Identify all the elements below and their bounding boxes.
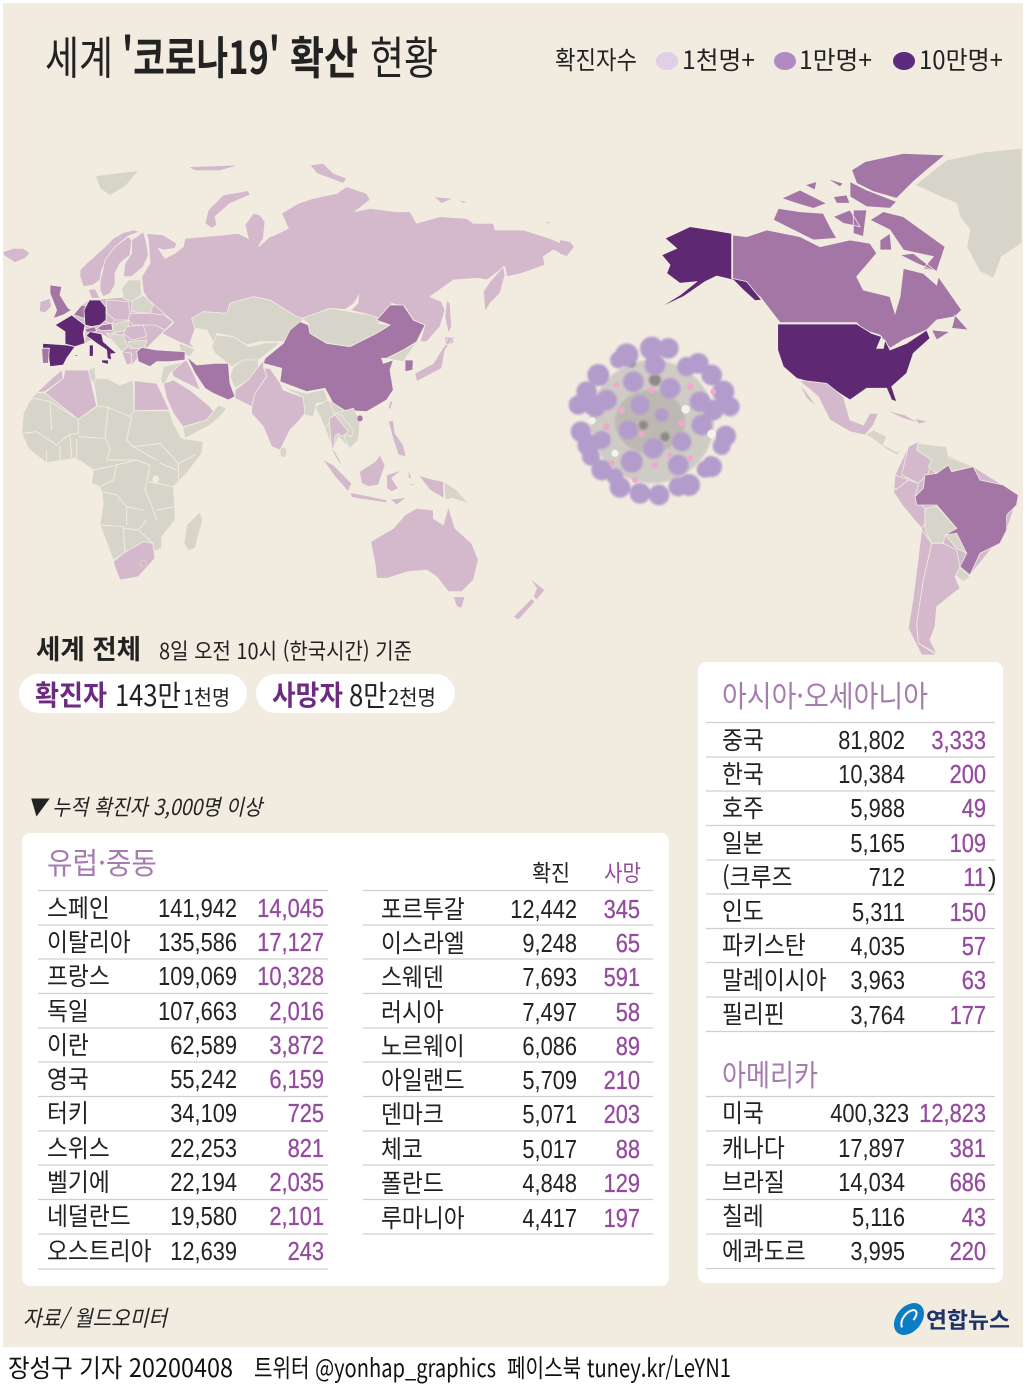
- country names: 브라질: [722, 1162, 785, 1198]
- pill: confirmed total: [19, 673, 247, 715]
- deaths: 200: [950, 760, 986, 789]
- country names, right column: [381, 889, 465, 1234]
- Bolivia: [925, 506, 957, 543]
- Severnaya Zemlya: [310, 163, 347, 183]
- deaths: 220: [950, 1237, 986, 1266]
- confirmed: 3,963: [850, 966, 905, 995]
- country names, right column: 덴마크: [381, 1094, 444, 1130]
- United States: [778, 324, 930, 402]
- deaths, right column: 591: [604, 963, 640, 992]
- Oman and Yemen: [183, 405, 227, 438]
- confirmed, left column: 141,942: [158, 894, 237, 923]
- Ecuador: [894, 475, 908, 490]
- Belarus: [132, 295, 153, 313]
- deaths, left column: 3,872: [269, 1031, 324, 1060]
- map: Svalbard: [96, 171, 138, 195]
- confirmed: 712: [869, 863, 905, 892]
- pill: confirmed total: 143만: [115, 673, 181, 715]
- Brazil: [915, 465, 1018, 575]
- country names: 인도: [722, 891, 764, 927]
- pill: death total: 2천명: [388, 682, 436, 712]
- confirmed: 3,764: [850, 1001, 905, 1030]
- pill: death total: [256, 673, 455, 715]
- deaths, right column: [604, 895, 640, 1233]
- Canadian Arctic islands: [773, 153, 968, 340]
- Morocco: [37, 370, 63, 393]
- Austria: [97, 323, 113, 331]
- Sweden: [100, 237, 132, 297]
- Lake Baikal: [344, 294, 359, 312]
- Paraguay: [945, 533, 967, 553]
- confirmed, right column: 7,693: [522, 963, 577, 992]
- Pakistan: [235, 357, 267, 407]
- closing parenthesis: ): [988, 862, 997, 892]
- title: [45, 22, 438, 87]
- Malay Peninsula: [330, 447, 343, 467]
- title: '코로나19': [122, 22, 280, 87]
- Caucasus: [178, 343, 195, 357]
- logo: Yonhap News: [888, 1297, 1010, 1341]
- central Europe land: [72, 295, 173, 365]
- legend: confirmed cases: 확진자수: [555, 41, 637, 77]
- legend: confirmed cases: 1만명+: [799, 41, 872, 77]
- Indochina land: [315, 400, 360, 450]
- heading: world total: [36, 628, 412, 667]
- pill: confirmed total: 확진자: [35, 674, 107, 714]
- confirmed, right column: 6,086: [522, 1032, 577, 1061]
- Romania: [123, 325, 147, 340]
- map: Southeast Asia and Oceania: [280, 400, 545, 620]
- deaths, right column: 197: [604, 1204, 640, 1233]
- Australia: [371, 507, 478, 592]
- confirmed: 4,035: [850, 932, 905, 961]
- pill: death total: 8만: [349, 673, 387, 715]
- Saudi Arabia: [163, 380, 213, 427]
- Balkans: [107, 333, 128, 352]
- Alaska: [658, 227, 762, 308]
- France: [55, 315, 85, 347]
- map: Russia and northern and central Asia: [142, 163, 573, 450]
- Czechia: [100, 313, 115, 324]
- country names, left column: 오스트리아: [47, 1231, 152, 1267]
- country names, right column: 러시아: [381, 992, 444, 1028]
- Iraq: [170, 360, 200, 390]
- confirmed, left column: 12,639: [170, 1237, 237, 1266]
- confirmed: 3,995: [850, 1237, 905, 1266]
- panel: Asia, Oceania and Americas table: [698, 662, 1003, 1283]
- confirmed, right column: 7,497: [522, 998, 577, 1027]
- Finland: [123, 232, 148, 277]
- Canada: [733, 230, 962, 348]
- deaths, right column: 65: [616, 929, 640, 958]
- deaths, left column: 10,328: [257, 962, 324, 991]
- deaths, left column: 6,159: [269, 1065, 324, 1094]
- map: North America: [658, 148, 1022, 402]
- country names: 미국: [722, 1093, 764, 1129]
- Iran: [187, 357, 235, 400]
- New Guinea, west: [418, 475, 444, 498]
- country names, left column: 이탈리아: [47, 922, 131, 958]
- country names, left column: [47, 888, 152, 1267]
- Japan: [415, 337, 454, 382]
- Philippines: [388, 420, 406, 457]
- deaths: 177: [950, 1001, 986, 1030]
- confirmed: 81,802: [838, 726, 905, 755]
- Kazakhstan: [192, 297, 303, 345]
- byline: [8, 1349, 731, 1384]
- deaths: 11: [963, 863, 986, 892]
- Poland: [107, 300, 130, 320]
- deaths: 63: [962, 966, 986, 995]
- Thailand: [329, 415, 348, 450]
- Hispaniola: [915, 418, 928, 424]
- confirmed: 5,988: [850, 794, 905, 823]
- Germany: [84, 300, 106, 327]
- country names: (크루즈: [722, 857, 792, 893]
- Slovakia and Hungary: [113, 321, 128, 333]
- country names, left column: 스페인: [47, 888, 110, 924]
- country names: 칠레: [722, 1196, 764, 1232]
- Peru: [893, 480, 925, 528]
- country names: 한국: [722, 754, 764, 790]
- country names, left column: 영국: [47, 1059, 89, 1095]
- North Korea: [387, 343, 417, 362]
- column headers: 확진: [532, 854, 570, 888]
- deaths, right column: 345: [604, 895, 640, 924]
- country names, right column: 스웨덴: [381, 957, 444, 993]
- country names, left column: 네덜란드: [47, 1196, 131, 1232]
- confirmed, right column: 12,442: [510, 895, 577, 924]
- deaths, left column: 17,127: [257, 928, 324, 957]
- country names, right column: 이스라엘: [381, 923, 465, 959]
- Ireland: [39, 298, 52, 313]
- confirmed, right column: 4,848: [522, 1169, 577, 1198]
- Myanmar: [315, 400, 335, 428]
- country names, right column: 루마니아: [381, 1198, 465, 1234]
- confirmed: 400,323: [830, 1099, 909, 1128]
- Central Asia: [212, 335, 280, 367]
- confirmed, right column: 5,071: [522, 1100, 577, 1129]
- China: [263, 305, 425, 412]
- Lake Victoria: [152, 475, 159, 483]
- confirmed, left column: 135,586: [158, 928, 237, 957]
- deaths, right column: 88: [616, 1135, 640, 1164]
- confirmed, left column: 34,109: [170, 1099, 237, 1128]
- Iceland: [3, 248, 30, 263]
- Hainan: [357, 415, 363, 421]
- country names, left column: 독일: [47, 991, 89, 1027]
- map: Latin America: [798, 380, 1018, 655]
- Bulgaria: [128, 340, 147, 348]
- country names: 필리핀: [722, 994, 785, 1030]
- deaths: 686: [950, 1168, 986, 1197]
- map: Chukotka tip: [560, 240, 574, 255]
- heading: Americas: 아메리카: [722, 1051, 818, 1095]
- pill: death total: 사망자: [272, 674, 343, 714]
- deaths, left column: 821: [288, 1134, 324, 1163]
- confirmed: 10,384: [838, 760, 905, 789]
- Russia: [142, 187, 573, 348]
- confirmed, left column: [158, 894, 237, 1266]
- country names: [722, 720, 827, 1267]
- Novaya Zemlya: [205, 191, 250, 228]
- deaths: 57: [962, 932, 986, 961]
- South Korea: [405, 360, 413, 372]
- Baltic states: [122, 280, 142, 302]
- Tunisia: [88, 367, 96, 383]
- byline: 트위터 @yonhap_graphics: [254, 1349, 496, 1384]
- country names, right column: 아일랜드: [381, 1060, 465, 1096]
- map: Africa and Arabia: [22, 367, 227, 580]
- Nepal, Bangladesh and Bhutan: [282, 387, 328, 417]
- Africa borders: [22, 398, 195, 553]
- country names, right column: 노르웨이: [381, 1026, 465, 1062]
- confirmed, left column: 55,242: [170, 1065, 237, 1094]
- legend: confirmed cases: 1천명+: [682, 41, 755, 77]
- title: 현황: [370, 22, 438, 87]
- column headers: 사망: [604, 854, 641, 888]
- Tasmania: [453, 597, 465, 608]
- country names: 캐나다: [722, 1128, 785, 1164]
- Lesotho: [140, 560, 146, 567]
- confirmed, left column: 22,253: [170, 1134, 237, 1163]
- Laos, Cambodia and Vietnam: [335, 408, 360, 448]
- Denmark: [88, 288, 100, 298]
- country names, left column: 벨기에: [47, 1162, 110, 1198]
- Greenland: [915, 148, 1022, 278]
- confirmed: 5,165: [850, 829, 905, 858]
- country names: 중국: [722, 720, 764, 756]
- Mongolia: [302, 308, 390, 347]
- heading: Europe and Middle East: 유럽·중동: [47, 839, 157, 883]
- deaths: 381: [950, 1134, 986, 1163]
- country names, right column: 폴란드: [381, 1163, 444, 1199]
- confirmed, right column: 5,017: [522, 1135, 577, 1164]
- logo: Yonhap News: 연합뉴스: [926, 1303, 1010, 1335]
- confirmed: [830, 726, 909, 1266]
- Papua New Guinea: [444, 482, 468, 503]
- South Africa: [113, 542, 155, 580]
- Uruguay: [955, 567, 970, 582]
- Canary Islands: [19, 391, 31, 394]
- deaths, right column: 203: [604, 1100, 640, 1129]
- country names: 에콰도르: [722, 1231, 806, 1267]
- confirmed, left column: 107,663: [158, 997, 237, 1026]
- Portugal: [42, 348, 49, 363]
- icon: coronavirus: [571, 339, 737, 503]
- deaths, right column: 210: [604, 1066, 640, 1095]
- New Zealand: [513, 578, 545, 620]
- legend: confirmed cases: 10만명+: [919, 41, 1003, 77]
- deaths: [919, 726, 986, 1266]
- map: Europe: [3, 230, 185, 394]
- Colombia: [902, 442, 932, 483]
- Ukraine: [128, 313, 173, 330]
- Venezuela and Guianas: [917, 443, 973, 473]
- deaths: 109: [950, 829, 986, 858]
- deaths, left column: 2,016: [269, 997, 324, 1026]
- confirmed: 5,116: [852, 1203, 905, 1232]
- deaths, left column: 725: [288, 1099, 324, 1128]
- deaths, right column: 89: [616, 1032, 640, 1061]
- confirmed, left column: 109,069: [158, 962, 237, 991]
- deaths: 12,823: [919, 1099, 986, 1128]
- confirmed: 17,897: [838, 1134, 905, 1163]
- confirmed: 5,311: [852, 898, 905, 927]
- Africa: [22, 393, 203, 560]
- Central America: [865, 430, 902, 455]
- legend: confirmed cases: [555, 41, 1003, 77]
- country names: 일본: [722, 823, 764, 859]
- source: 자료/ 월드오미터: [23, 1301, 170, 1333]
- confirmed, right column: 9,248: [522, 929, 577, 958]
- country names: 파키스탄: [722, 925, 806, 961]
- Benelux: [73, 305, 88, 318]
- Chile: [908, 530, 937, 655]
- deaths: 49: [962, 794, 986, 823]
- Spain: [43, 343, 77, 367]
- deaths, left column: 2,101: [269, 1202, 324, 1231]
- Moluccas: [408, 468, 412, 478]
- India: [252, 368, 305, 450]
- Kamchatka: [483, 267, 505, 312]
- country names, right column: 포르투갈: [381, 889, 465, 925]
- Borneo: [359, 455, 385, 487]
- pill: confirmed total: 1천명: [183, 682, 230, 712]
- Sri Lanka: [280, 447, 286, 457]
- confirmed, left column: 22,194: [170, 1168, 237, 1197]
- heading: Asia and Oceania: 아시아·오세아니아: [722, 672, 928, 716]
- column headers: [532, 854, 641, 888]
- Java: [350, 493, 387, 503]
- United Kingdom: [50, 285, 72, 318]
- deaths, left column: 243: [288, 1237, 324, 1266]
- confirmed, right column: 5,709: [522, 1066, 577, 1095]
- Algeria: [45, 370, 97, 419]
- country names, left column: 프랑스: [47, 956, 110, 992]
- icon: Yonhap globe: [888, 1297, 930, 1341]
- deaths, left column: [257, 894, 324, 1266]
- country names, right column: 체코: [381, 1129, 423, 1165]
- deaths: 150: [950, 898, 986, 927]
- New Siberian Islands: [433, 197, 553, 224]
- Syria and Jordan: [161, 362, 183, 387]
- confirmed, right column: 4,417: [522, 1204, 577, 1233]
- Mexico: [798, 380, 878, 435]
- Lesser Sunda Islands: [390, 483, 417, 505]
- Libya: [93, 378, 134, 417]
- Cuba: [885, 410, 920, 423]
- confirmed, right column: [510, 895, 577, 1233]
- panel: Europe and Middle East table: [22, 833, 669, 1286]
- deaths: 3,333: [931, 726, 986, 755]
- deaths, left column: 2,035: [269, 1168, 324, 1197]
- Taiwan: [388, 401, 393, 409]
- Norway: [80, 230, 140, 287]
- confirmed: 14,034: [838, 1168, 905, 1197]
- deaths: 43: [962, 1203, 986, 1232]
- Greece: [122, 352, 132, 365]
- Franz Josef Land: [188, 165, 240, 171]
- Sakhalin: [445, 300, 452, 333]
- South America land: [893, 442, 1018, 655]
- country names, left column: 터키: [47, 1093, 89, 1129]
- country names: 말레이시아: [722, 960, 827, 996]
- country names, left column: 이란: [47, 1025, 89, 1061]
- confirmed, left column: 19,580: [170, 1202, 237, 1231]
- Sumatra: [323, 459, 352, 492]
- Afghanistan: [230, 360, 258, 388]
- deaths, right column: 58: [616, 998, 640, 1027]
- byline: 장성구 기자 20200408: [8, 1349, 233, 1384]
- Switzerland: [85, 327, 97, 333]
- title: 세계: [45, 22, 113, 87]
- Madagascar: [184, 512, 203, 551]
- heading: world total: 세계 전체: [36, 628, 141, 667]
- country names: 호주: [722, 788, 764, 824]
- note: threshold: ▼ 누적 확진자 3,000명 이상: [27, 790, 264, 822]
- country names, left column: 스위스: [47, 1128, 110, 1164]
- Argentina: [917, 543, 960, 653]
- Turkey: [137, 347, 185, 367]
- title: 확산: [290, 22, 358, 87]
- Italy: [86, 332, 117, 364]
- Egypt: [134, 381, 169, 411]
- Sulawesi: [387, 470, 402, 492]
- deaths, left column: 14,045: [257, 894, 324, 923]
- confirmed, left column: 62,589: [170, 1031, 237, 1060]
- byline: 페이스북 tuney.kr/LeYN1: [507, 1349, 731, 1384]
- heading: world total: 8일 오전 10시 (한국시간) 기준: [159, 634, 412, 666]
- deaths, right column: 129: [604, 1169, 640, 1198]
